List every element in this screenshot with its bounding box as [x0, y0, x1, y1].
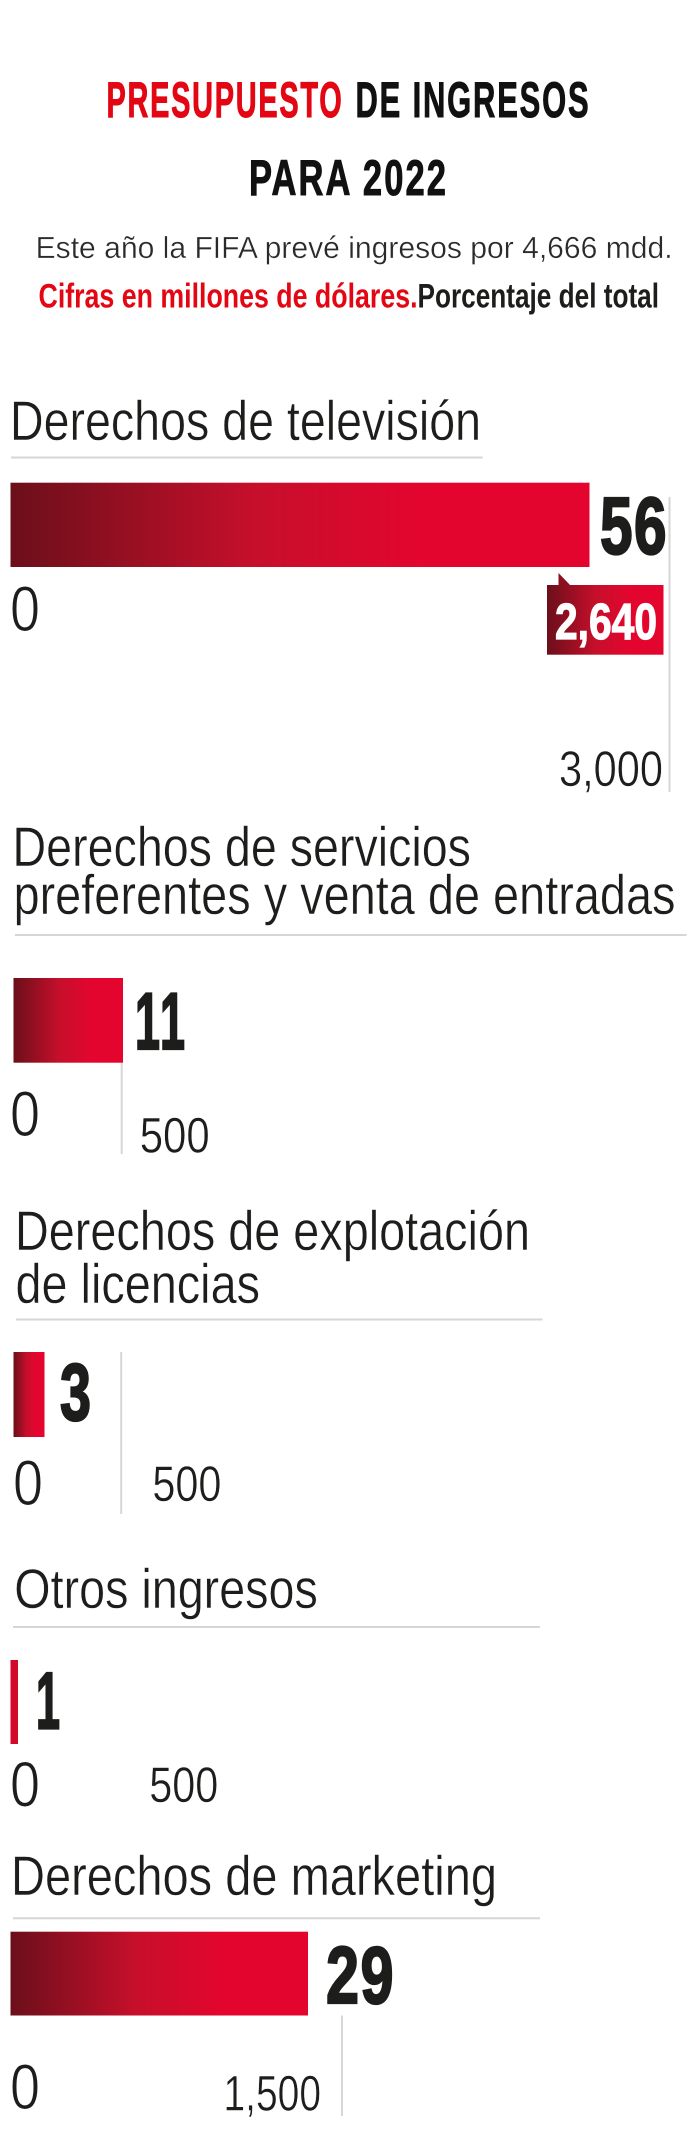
callout value: 2,640: [555, 593, 657, 650]
axis zero: 0: [13, 1447, 43, 1519]
bar: [10, 1932, 308, 2016]
bar: [10, 483, 590, 567]
bar: [14, 978, 123, 1063]
bar: [14, 1352, 44, 1437]
axis max: 500: [152, 1456, 221, 1512]
subtitle: Este año la FIFA prevé ingresos por 4,666 mdd.: [36, 230, 673, 265]
axis zero: 0: [10, 1078, 40, 1150]
heading: Derechos de servicios: [12, 815, 471, 878]
percentage: 29: [326, 1931, 395, 2021]
callout value: [547, 573, 664, 655]
panel: derechos de marketing: [10, 1844, 540, 2123]
heading: Derechos de marketing: [11, 1844, 497, 1907]
bar: [10, 1660, 18, 1744]
panel: otros ingresos: [10, 1557, 540, 1821]
heading: [12, 815, 676, 926]
axis max: 1,500: [224, 2066, 321, 2122]
title: [106, 72, 590, 206]
axis max: 500: [140, 1108, 210, 1164]
axis zero: 0: [10, 2051, 40, 2123]
heading: de licencias: [16, 1252, 260, 1315]
heading: Otros ingresos: [14, 1557, 318, 1620]
percentage: 3: [60, 1348, 91, 1438]
heading: Derechos de televisión: [10, 389, 481, 452]
panel: derechos de televisión: [10, 389, 670, 797]
axis max: 3,000: [559, 741, 663, 797]
percentage: 1: [36, 1656, 60, 1746]
panel: derechos de explotación: [13, 1199, 542, 1519]
panel: derechos de servicios: [10, 815, 686, 1164]
percentage: 1: [135, 977, 160, 1067]
percentage: 1: [160, 977, 185, 1067]
axis zero: 0: [10, 573, 40, 645]
legend: Cifras en millones de dólares.: [38, 278, 418, 316]
title: PRESUPUESTO: [106, 72, 344, 128]
axis max: 500: [149, 1757, 218, 1813]
axis zero: 0: [10, 1749, 40, 1821]
percentage: 56: [600, 482, 668, 572]
title: PARA 2022: [249, 150, 448, 206]
heading: [15, 1199, 530, 1315]
heading: Derechos de explotación: [15, 1199, 530, 1262]
